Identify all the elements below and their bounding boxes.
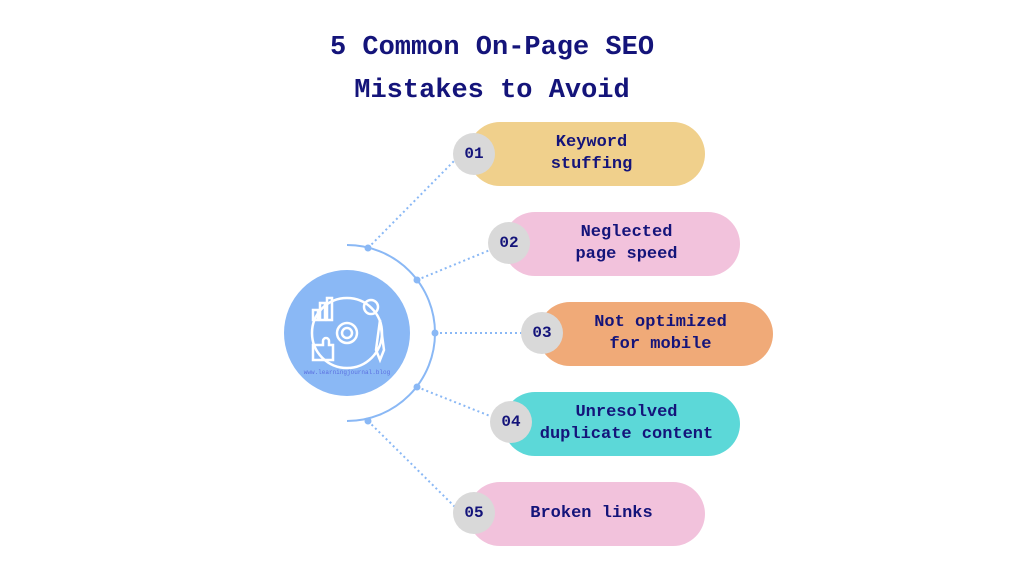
text: stuffing bbox=[551, 155, 632, 174]
title: 5 Common On-Page SEO bbox=[330, 33, 654, 63]
icon: SEO circle bbox=[284, 270, 410, 396]
text: 03 bbox=[532, 324, 552, 342]
item 03 bbox=[521, 302, 773, 366]
text: for mobile bbox=[609, 335, 712, 354]
text: 01 bbox=[464, 145, 484, 163]
text: Neglected bbox=[581, 223, 672, 242]
icon: SEO circle: www.learningjournal.blog bbox=[304, 369, 391, 376]
text: Keyword bbox=[556, 133, 627, 152]
text: Unresolved bbox=[575, 403, 678, 422]
text: duplicate content bbox=[540, 425, 713, 444]
item 01 bbox=[453, 122, 705, 186]
text: 04 bbox=[501, 413, 521, 431]
item 05 bbox=[453, 482, 705, 546]
text: 02 bbox=[499, 234, 519, 252]
text: page speed bbox=[575, 245, 678, 264]
title bbox=[330, 33, 654, 106]
text: Broken links bbox=[530, 504, 653, 523]
text: 05 bbox=[464, 504, 484, 522]
text: Not optimized bbox=[594, 313, 727, 332]
item 02 bbox=[488, 212, 740, 276]
item 04 bbox=[490, 392, 740, 456]
title: Mistakes to Avoid bbox=[354, 76, 630, 106]
